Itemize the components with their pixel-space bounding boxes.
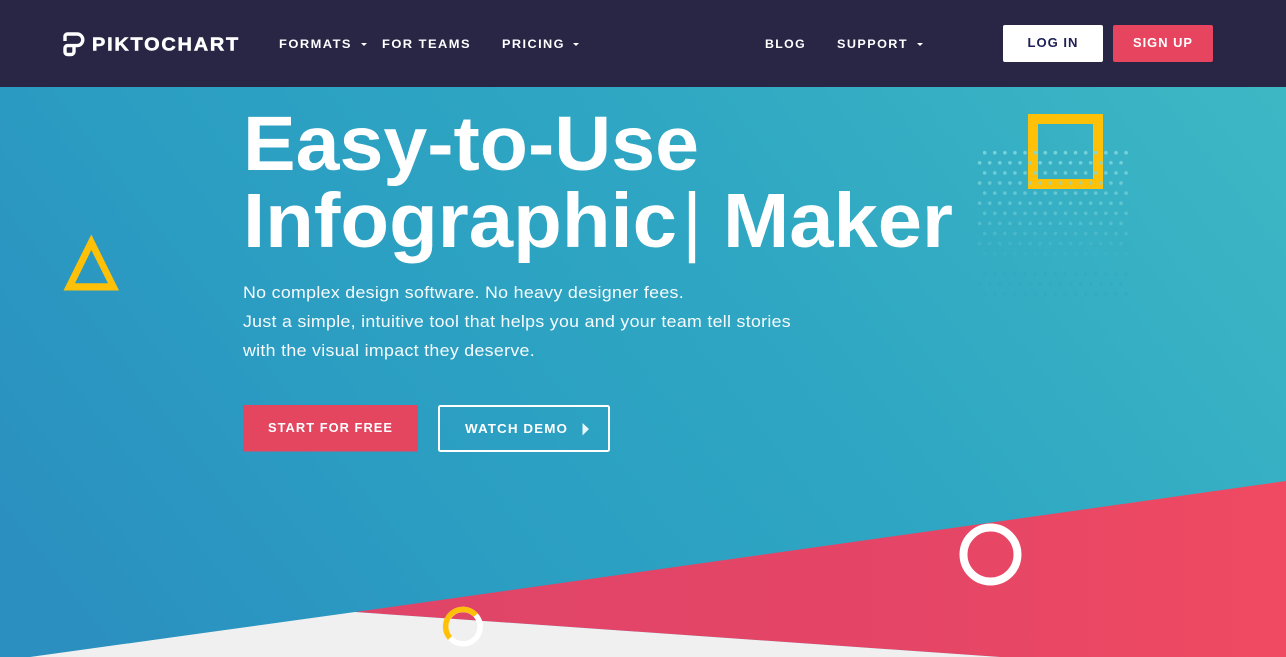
- button: Start for free: [243, 405, 418, 452]
- icon: white ring: [964, 528, 1018, 582]
- icon: yellow and white progress ring: [446, 609, 480, 644]
- nav link: Formats: FORMATS: [279, 39, 352, 51]
- title: Infographic: [243, 178, 677, 264]
- light grey bottom shape: [30, 612, 1000, 657]
- navigation bar: [0, 0, 1286, 87]
- subtitle text block: Just a simple, intuitive tool that helps you and your team tell stories: [243, 312, 791, 331]
- title: [243, 101, 953, 264]
- nav link: Blog: BLOG: [765, 39, 806, 51]
- nav link: For Teams: FOR TEAMS: [382, 39, 471, 51]
- button: Watch demo: WATCH DEMO: [465, 422, 568, 436]
- icon: yellow triangle: [64, 234, 119, 290]
- button: Start for free: START FOR FREE: [268, 421, 393, 435]
- button: Sign up: SIGN UP: [1133, 36, 1193, 50]
- button: Log in: LOG IN: [1028, 35, 1078, 50]
- pink diagonal shape: [355, 481, 1286, 657]
- subtitle text block: [242, 283, 791, 360]
- nav link: Support: SUPPORT: [837, 39, 908, 51]
- subtitle text block: with the visual impact they deserve.: [242, 341, 535, 360]
- logo: Piktochart: PIKTOCHART: [92, 34, 240, 54]
- title: Easy-to-Use: [243, 101, 699, 187]
- icon: yellow square: [1033, 119, 1098, 184]
- title: |: [682, 178, 702, 264]
- nav link: Pricing: PRICING: [502, 39, 565, 51]
- button: Sign up: [1113, 25, 1213, 62]
- dot pattern: [978, 150, 1128, 245]
- subtitle text block: No complex design software. No heavy designer fees.: [243, 283, 684, 302]
- button: Log in: [1003, 25, 1103, 62]
- button: Watch demo: [439, 406, 609, 451]
- title: Maker: [723, 178, 953, 264]
